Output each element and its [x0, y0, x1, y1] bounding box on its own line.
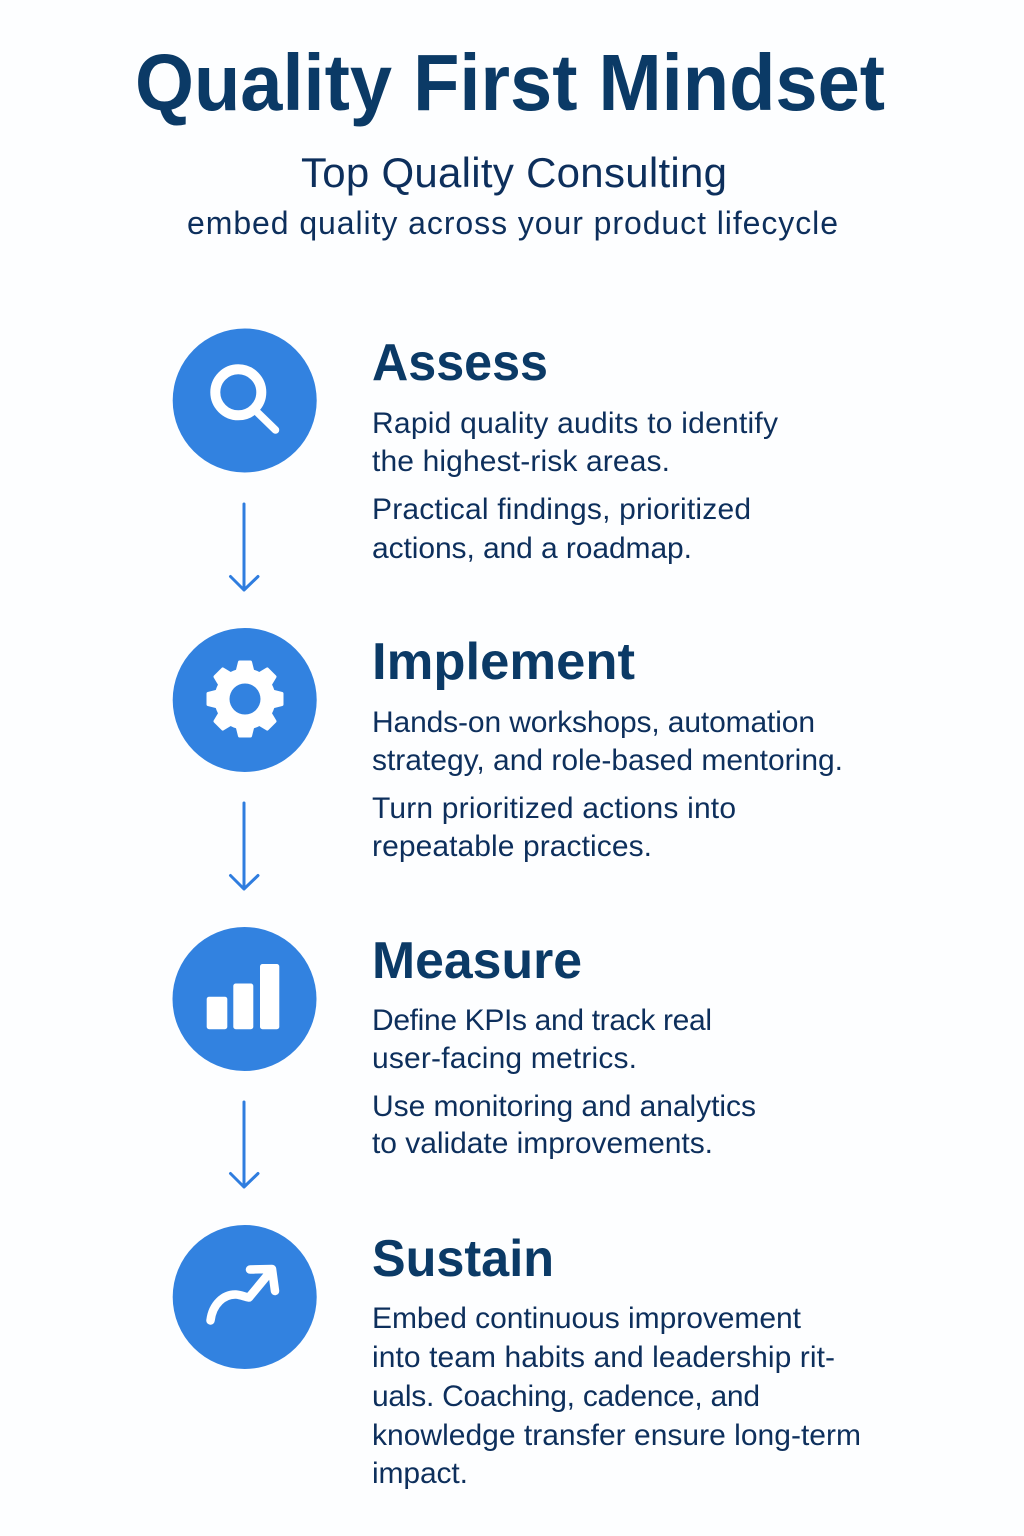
- text: Implement description: [372, 706, 843, 863]
- text: Sustain description: uals. Coaching, cadence, and: [372, 1380, 760, 1413]
- panel: Sustain step: [173, 1225, 861, 1490]
- text: Assess description: the highest-risk areas.: [372, 445, 670, 478]
- text: Assess description: actions, and a roadmap.: [372, 532, 692, 565]
- panel: Assess step: [173, 328, 778, 565]
- text: Implement description: strategy, and role-based mentoring.: [372, 744, 843, 777]
- panel: Measure step: [172, 927, 756, 1160]
- heading: Sustain: Sustain: [372, 1230, 554, 1288]
- icon: gear: [173, 628, 317, 772]
- arrow: Assess to Implement: [230, 504, 258, 590]
- text: Sustain description: impact.: [372, 1457, 468, 1490]
- text: Implement description: Turn prioritized actions into: [372, 792, 736, 825]
- text: Measure description: user-facing metrics.: [372, 1042, 637, 1075]
- heading: Implement: Implement: [372, 633, 635, 691]
- panel: Implement step: [173, 628, 843, 863]
- text: Measure description: [372, 1004, 756, 1160]
- text: Sustain description: [372, 1302, 861, 1490]
- tagline: embed quality across your product lifecycle: [187, 205, 838, 241]
- header: [135, 38, 885, 241]
- text: Sustain description: into team habits and leadership rit-: [372, 1341, 835, 1374]
- arrow: Implement to Measure: [230, 803, 258, 889]
- text: Implement description: Hands-on workshops, automation: [372, 706, 815, 739]
- text: Assess description: Rapid quality audits to identify: [372, 407, 778, 440]
- icon: upward trend arrow: [173, 1225, 317, 1369]
- heading: Assess: Assess: [372, 334, 548, 392]
- text: Measure description: Define KPIs and track real: [372, 1004, 712, 1037]
- title: Quality First Mindset: [135, 38, 885, 127]
- icon: bar chart: [172, 927, 316, 1071]
- text: Measure description: to validate improvements.: [372, 1127, 713, 1160]
- text: Implement description: repeatable practices.: [372, 830, 652, 863]
- arrow: Measure to Sustain: [230, 1102, 258, 1187]
- text: Sustain description: Embed continuous improvement: [372, 1302, 802, 1335]
- text: Sustain description: knowledge transfer ensure long-term: [372, 1419, 861, 1452]
- subtitle: Top Quality Consulting: [301, 149, 727, 196]
- text: Measure description: Use monitoring and analytics: [372, 1090, 756, 1123]
- text: Assess description: [372, 407, 778, 565]
- text: Assess description: Practical findings, prioritized: [372, 493, 751, 526]
- icon: magnifying glass: [173, 328, 317, 472]
- heading: Measure: Measure: [372, 932, 582, 990]
